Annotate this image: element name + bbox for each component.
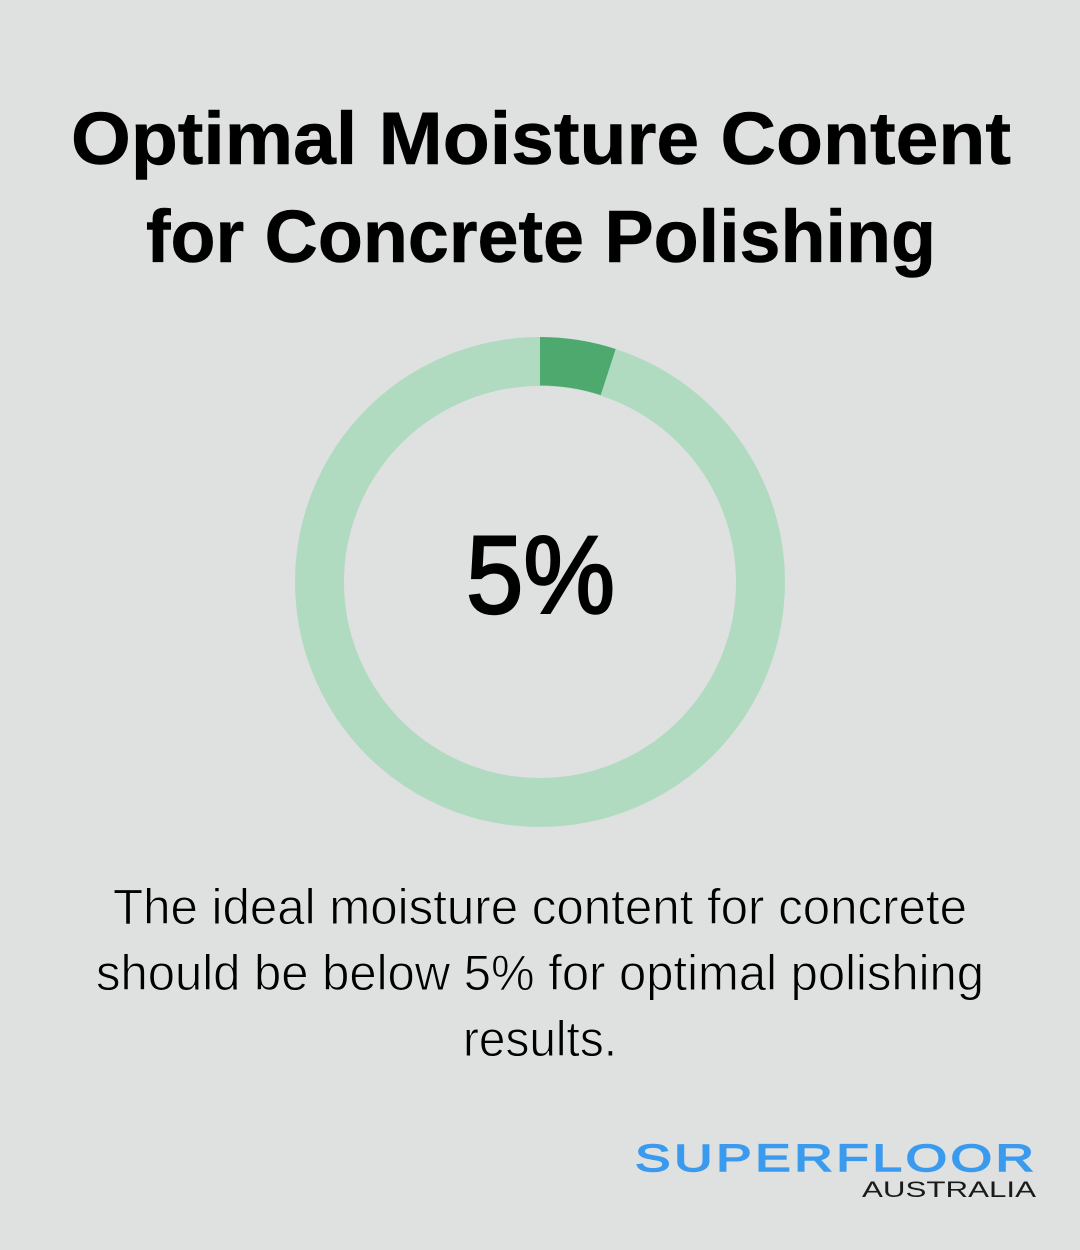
logo: Superfloor Australia xyxy=(635,1136,1036,1202)
donut chart xyxy=(320,337,760,802)
title: for Concrete Polishing xyxy=(146,195,936,278)
title xyxy=(71,97,1011,278)
description text: results. xyxy=(463,1011,617,1067)
logo subtext: AUSTRALIA xyxy=(862,1177,1036,1202)
description text: should be below 5% for optimal polishing xyxy=(96,945,984,1001)
donut segment: 5% xyxy=(540,337,616,395)
description text xyxy=(96,879,984,1067)
center value: 5% xyxy=(466,514,615,637)
donut track xyxy=(320,362,760,802)
logo wordmark: SUPERFLOOR xyxy=(635,1136,1034,1179)
title: Optimal Moisture Content xyxy=(71,97,1011,180)
description text: The ideal moisture content for concrete xyxy=(113,879,967,935)
